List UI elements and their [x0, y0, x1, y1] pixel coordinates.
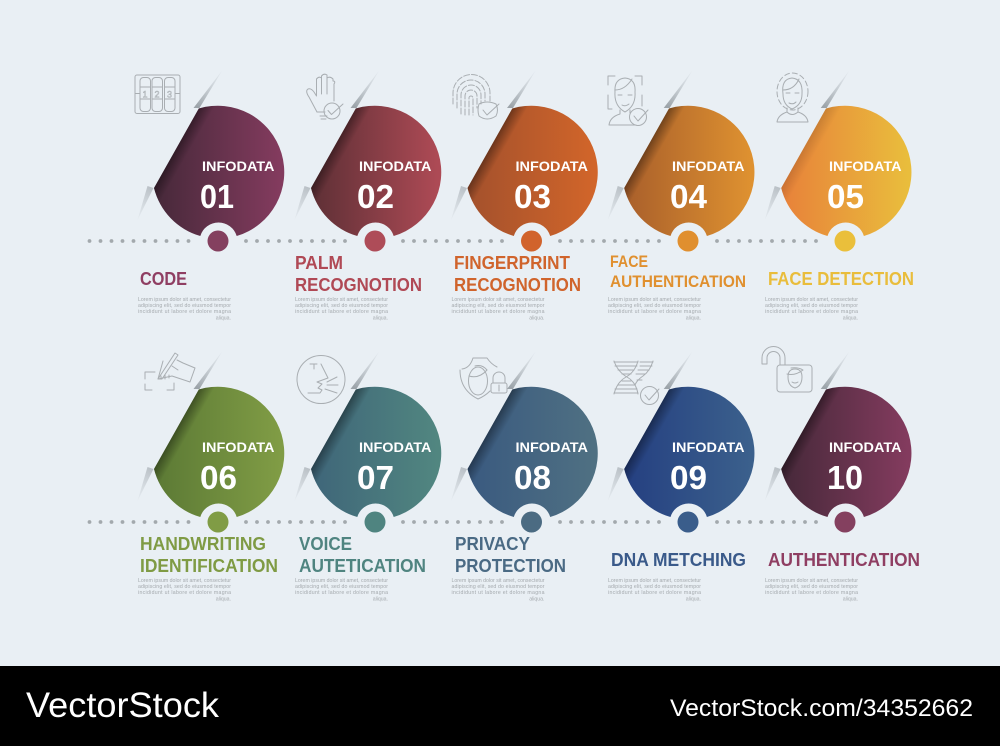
label: fingerprint recognotion: FINGERPRINT: [454, 252, 571, 273]
badge 10: INFODATA: [829, 439, 902, 455]
icon: voice authentication: [297, 356, 345, 404]
icon: privacy protection: [460, 358, 507, 399]
text block 05: incididunt ut labore et dolore magna: [765, 309, 858, 315]
badge 04: 04: [670, 178, 708, 215]
badge 07: [294, 351, 441, 532]
text block 08: adipiscing elit, sed do eiusmod tempor: [452, 584, 545, 590]
icon: code keypad: 3: [167, 90, 172, 100]
text block 04: Lorem ipsum dolor sit amet, consectetur: [608, 297, 701, 303]
badge 09: 09: [670, 459, 707, 496]
badge 03: [451, 70, 598, 252]
label: authentication: AUTHENTICATION: [768, 549, 920, 570]
text block 10: adipiscing elit, sed do eiusmod tempor: [765, 584, 858, 590]
text block 07: aliqua.: [373, 596, 388, 602]
icon: code keypad: 2: [154, 90, 160, 100]
label: face detection: FACE DETECTION: [768, 268, 914, 289]
label: face authentication: FACE: [610, 252, 648, 271]
icon: handwriting identification: [145, 353, 195, 390]
text block 06: Lorem ipsum dolor sit amet, consectetur: [138, 578, 231, 584]
icon: face authentication: [608, 76, 648, 126]
badge 06: 06: [200, 459, 237, 496]
text block 07: [295, 578, 388, 602]
icon: face detection: [777, 73, 808, 122]
badge 07: 07: [357, 459, 394, 496]
text block 04: aliqua.: [686, 316, 701, 322]
text block 02: [295, 297, 388, 322]
badge 04: INFODATA: [672, 158, 745, 174]
label: privacy protection: [455, 533, 566, 576]
text block 05: adipiscing elit, sed do eiusmod tempor: [765, 303, 858, 309]
dotted timeline: row 2: [90, 520, 818, 524]
text block 03: adipiscing elit, sed do eiusmod tempor: [452, 303, 545, 309]
label: privacy protection: PRIVACY: [455, 533, 531, 554]
text block 09: incididunt ut labore et dolore magna: [608, 590, 701, 596]
label: face authentication: AUTHENTICATION: [610, 272, 746, 291]
text block 08: incididunt ut labore et dolore magna: [452, 590, 545, 596]
badge 08: 08: [514, 459, 551, 496]
text block 09: aliqua.: [686, 596, 701, 602]
text block 05: Lorem ipsum dolor sit amet, consectetur: [765, 297, 858, 303]
badge 09: INFODATA: [672, 439, 745, 455]
text block 02: Lorem ipsum dolor sit amet, consectetur: [295, 297, 388, 303]
badge 02: 02: [357, 178, 394, 215]
badge 03: 03: [514, 178, 551, 215]
text block 01: aliqua.: [216, 316, 231, 322]
badge 07: INFODATA: [359, 439, 432, 455]
text block 03: Lorem ipsum dolor sit amet, consectetur: [452, 297, 545, 303]
text block 05: [765, 297, 858, 322]
icon: dna matching: [614, 361, 659, 404]
badge 01: INFODATA: [202, 158, 274, 174]
label: face authentication: [610, 252, 746, 291]
badge 02: [294, 70, 441, 252]
text block 09: adipiscing elit, sed do eiusmod tempor: [608, 584, 701, 590]
icon: fingerprint: [453, 74, 499, 119]
badge 06: INFODATA: [202, 439, 274, 455]
badge 06: [138, 351, 284, 532]
text block 03: [452, 297, 545, 322]
dotted timeline: row 1: [90, 239, 818, 243]
badge 09: [608, 351, 754, 532]
footer bar: VectorStock.com/34352662: [670, 695, 973, 722]
text block 04: adipiscing elit, sed do eiusmod tempor: [608, 303, 701, 309]
label: voice autetication: AUTETICATION: [299, 555, 426, 576]
footer bar: VectorStock: [26, 686, 220, 725]
label: handwriting identification: [140, 533, 278, 576]
label: fingerprint recognotion: [454, 252, 581, 295]
badge 08: [451, 351, 598, 532]
text block 06: incididunt ut labore et dolore magna: [138, 590, 231, 596]
label: palm recognotion: RECOGNOTION: [295, 274, 422, 295]
text block 08: aliqua.: [529, 596, 544, 602]
text block 01: incididunt ut labore et dolore magna: [138, 309, 231, 315]
text block 03: incididunt ut labore et dolore magna: [452, 309, 545, 315]
badge 02: INFODATA: [359, 158, 432, 174]
text block 01: [138, 297, 231, 322]
label: code: CODE: [140, 268, 187, 289]
text block 10: [765, 578, 858, 602]
text block 05: aliqua.: [843, 316, 858, 322]
badge 04: [608, 70, 754, 252]
text block 10: incididunt ut labore et dolore magna: [765, 590, 858, 596]
label: palm recognotion: PALM: [295, 252, 343, 273]
icon: code keypad: 1: [142, 90, 148, 100]
label: dna metching: DNA METCHING: [611, 549, 746, 570]
text block 04: [608, 297, 701, 322]
badge 10: [765, 351, 911, 532]
label: voice autetication: [299, 533, 426, 576]
icon: unlocked face: [762, 346, 812, 392]
text block 06: aliqua.: [216, 596, 231, 602]
footer bar: [0, 666, 1000, 746]
text block 06: [138, 578, 231, 602]
text block 07: adipiscing elit, sed do eiusmod tempor: [295, 584, 388, 590]
badge 05: 05: [827, 178, 864, 215]
badge 10: 10: [827, 459, 863, 496]
text block 01: Lorem ipsum dolor sit amet, consectetur: [138, 297, 231, 303]
badge 05: INFODATA: [829, 158, 902, 174]
badge 01: [138, 70, 284, 252]
label: handwriting identification: HANDWRITING: [140, 533, 266, 554]
label: handwriting identification: IDENTIFICATION: [140, 555, 278, 576]
text block 08: [452, 578, 545, 602]
label: voice autetication: VOICE: [299, 533, 352, 554]
icon: palm recognition: [307, 74, 343, 119]
text block 08: Lorem ipsum dolor sit amet, consectetur: [452, 578, 545, 584]
text block 10: Lorem ipsum dolor sit amet, consectetur: [765, 578, 858, 584]
text block 03: aliqua.: [529, 316, 544, 322]
badge 03: INFODATA: [516, 158, 588, 174]
text block 02: adipiscing elit, sed do eiusmod tempor: [295, 303, 388, 309]
text block 07: incididunt ut labore et dolore magna: [295, 590, 388, 596]
text block 10: aliqua.: [843, 596, 858, 602]
text block 04: incididunt ut labore et dolore magna: [608, 309, 701, 315]
text block 09: [608, 578, 701, 602]
text block 07: Lorem ipsum dolor sit amet, consectetur: [295, 578, 388, 584]
text block 02: incididunt ut labore et dolore magna: [295, 309, 388, 315]
text block 02: aliqua.: [373, 316, 388, 322]
label: fingerprint recognotion: RECOGNOTION: [454, 274, 581, 295]
badge 05: [765, 70, 911, 252]
badge 01: 01: [200, 178, 234, 215]
text block 09: Lorem ipsum dolor sit amet, consectetur: [608, 578, 701, 584]
label: privacy protection: PROTECTION: [455, 555, 566, 576]
text block 06: adipiscing elit, sed do eiusmod tempor: [138, 584, 231, 590]
icon: code keypad: [135, 75, 180, 114]
badge 08: INFODATA: [516, 439, 588, 455]
text block 01: adipiscing elit, sed do eiusmod tempor: [138, 303, 231, 309]
label: palm recognotion: [295, 252, 422, 295]
